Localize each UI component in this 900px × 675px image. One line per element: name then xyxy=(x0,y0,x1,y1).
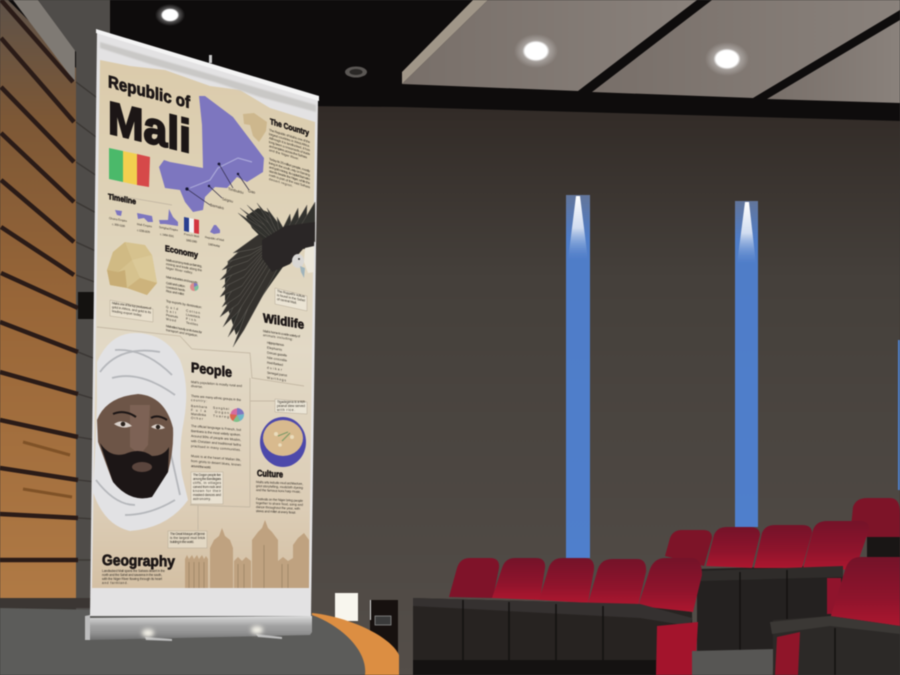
timeline labels: c. 1235-1670 xyxy=(137,228,150,234)
text: People body: Other xyxy=(191,416,204,421)
banner artwork background xyxy=(92,60,315,588)
text: Economy body: mining and trade along the xyxy=(166,262,202,272)
text: Culture body: dance throughout the year, with xyxy=(256,505,300,511)
text: People body: Bambara is the most widely spoken. xyxy=(191,429,241,437)
text: People body: Dogon xyxy=(215,410,229,415)
caption box: vulture: is found in the Sahel xyxy=(277,293,305,303)
text: Wildlife list: duiker xyxy=(267,366,283,372)
caption box: geography: building in the world. xyxy=(170,540,194,544)
caption box: people: masked dances and xyxy=(193,493,221,497)
text: People body: country: xyxy=(191,398,207,403)
Niger river xyxy=(190,158,252,188)
seats: front right row xyxy=(770,557,900,675)
text: Economy body: Niger River valley. xyxy=(166,266,193,275)
text: Economy body: Gold xyxy=(166,305,178,311)
caption box: people: among the Bandiagara xyxy=(193,477,221,481)
text: Economy body: Wood xyxy=(166,317,176,323)
heading: The Country: The Country xyxy=(270,116,309,138)
caption box: geography: The Great Mosque of Djenné xyxy=(170,532,205,536)
text: Wildlife list: Warthogs xyxy=(267,376,286,382)
text: Geography body: north and the Sahel and savanna in the south, xyxy=(102,573,162,577)
timeline map: Republic of Mali xyxy=(210,225,220,234)
timeline labels: Songhai Empire xyxy=(159,225,178,232)
text: Geography body xyxy=(102,569,165,585)
text: Geography body: Landlocked Mali spans the Sahara desert in the xyxy=(102,569,165,573)
caption box: people: carved from rock and xyxy=(193,485,221,489)
caption box: geography xyxy=(168,531,207,548)
text: Economy body: Fish xyxy=(186,317,196,322)
caption box: people: The Dogon people live xyxy=(193,473,221,477)
skyline of Djenne mosque xyxy=(185,520,309,588)
timeline labels: c. 300-1100 xyxy=(112,222,125,228)
timeline labels: 1892-1960 xyxy=(186,238,197,244)
face xyxy=(97,394,173,498)
caption box: culture: with rice. xyxy=(277,408,295,412)
text: Wildlife list: Red-flanked xyxy=(267,361,283,367)
text: Culture body: Festivals on the Niger bring people xyxy=(256,497,303,503)
text: People body: with Christian and traditional faiths xyxy=(191,439,241,447)
text: The Country body: largest countries in West Africa. xyxy=(269,132,310,148)
city labels: Ségou xyxy=(222,197,233,204)
heading: Economy: Economy xyxy=(165,243,198,260)
text: Wildlife list: Nile crocodile xyxy=(267,356,287,363)
text: Economy body: Salt xyxy=(166,309,176,315)
portrait of a Tuareg man xyxy=(93,333,188,531)
text: People body: Tuareg xyxy=(213,414,229,419)
heading: Wildlife: Wildlife xyxy=(263,311,304,332)
text: Geography body: with the Niger River flowing through its heart xyxy=(102,577,162,581)
text: Culture body: Mali's arts include mud architecture, xyxy=(256,480,303,486)
text: The Country body: and gold mining. Its capital Bamako xyxy=(269,165,310,181)
text: Wildlife list: animals including: xyxy=(263,333,293,342)
stage floor xyxy=(0,608,365,675)
text: The Country body: long been a crossroads of trade xyxy=(269,140,310,156)
Mali flag xyxy=(109,148,150,187)
text: Economy body: Gold and cotton xyxy=(166,281,185,288)
vulture upper left wing mass xyxy=(246,208,286,242)
text: Economy body: Top exports by destination: xyxy=(166,299,202,309)
auditorium wall xyxy=(300,106,900,675)
vulture upper left wing fan xyxy=(238,203,288,242)
eyebrows xyxy=(113,412,167,420)
text: Economy body: Mali's economy rests on farming, xyxy=(166,258,202,268)
map of Mali xyxy=(159,96,264,212)
title line: Mali: Mali xyxy=(108,92,191,163)
timeline labels: c. 1464-1591 xyxy=(160,232,174,238)
gold nugget xyxy=(107,242,157,295)
panel divider lines xyxy=(97,194,305,530)
text: Wildlife list: Hippopotamus xyxy=(267,341,284,347)
timeline flag: France xyxy=(184,217,199,234)
text: The Country body xyxy=(269,128,310,193)
hook on top rail xyxy=(209,55,212,63)
text: Economy body: transport and irrigation. xyxy=(166,328,198,338)
text: Economy body: Mali relies heavily on its rivers for xyxy=(166,324,203,335)
text: People body: Mandinka xyxy=(191,412,206,417)
text: Wildlife list: Dorcas gazelle xyxy=(267,351,287,358)
bowl of stew xyxy=(260,417,306,467)
banner stand base xyxy=(85,615,312,641)
turban xyxy=(93,333,188,531)
text: Wildlife list: Mali is home to a wide variety of xyxy=(263,329,300,339)
title line: Republic of: Republic of xyxy=(108,71,190,112)
vulture upper right wing fan xyxy=(283,202,315,242)
stand highlights xyxy=(142,626,263,637)
banner white sheet xyxy=(90,31,318,616)
caption box: vulture: of central Mali. xyxy=(277,297,297,305)
text: The Country body: stands beside the Niger, while the xyxy=(269,169,310,185)
seats: middle row xyxy=(665,521,869,651)
text: Culture body: stews and millet at every feast. xyxy=(256,509,296,515)
timeline labels: 1960-today xyxy=(208,242,221,248)
top rail xyxy=(96,29,319,101)
text: Culture body xyxy=(256,480,303,515)
heading: People: People xyxy=(191,359,232,380)
seats: back row xyxy=(850,498,900,557)
vulture lower wing feathers xyxy=(220,232,280,347)
caption box: vulture xyxy=(275,288,307,311)
text: Wildlife list: Elephants xyxy=(267,346,282,352)
forehead highlight and nose xyxy=(130,405,150,455)
pie chart: ethnic groups xyxy=(230,408,244,422)
text: Economy body: Textiles xyxy=(186,321,198,327)
wood panelled wall xyxy=(0,0,110,610)
text: Wildlife list: Senegal parrot xyxy=(267,371,287,378)
title xyxy=(108,71,191,163)
text: Geography body: and farmland. xyxy=(102,581,128,585)
text: The Country body: living in the south, rely on farming xyxy=(269,161,310,177)
text: People body: around the world. xyxy=(191,464,211,470)
timeline labels: Ghana Empire xyxy=(109,216,127,223)
timeline map: Ghana Empire xyxy=(115,210,122,216)
caption box: people: astronomy. xyxy=(193,497,211,501)
timeline xyxy=(109,209,224,248)
text: People body: Music is at the heart of Malian life, xyxy=(191,454,241,462)
ceiling spotlights xyxy=(155,4,749,78)
timeline map: Mali Empire xyxy=(137,213,153,222)
text: People body: Bambara xyxy=(191,404,207,409)
orange stage rim xyxy=(312,613,399,675)
vulture body xyxy=(262,222,315,272)
text: The Country body: and empires across the Sahara xyxy=(269,144,307,159)
heading: Timeline: Timeline xyxy=(108,192,136,206)
heading: Culture: Culture xyxy=(257,468,283,480)
text: Culture body: together to share food, song and xyxy=(256,501,303,507)
text: People body: Around 90% of people are Muslim, xyxy=(191,434,241,442)
text: People body: The official language is French, but xyxy=(191,424,241,432)
vulture ruff and head xyxy=(292,246,314,278)
floor light box xyxy=(335,593,358,621)
caption box: geography: is the largest mud brick xyxy=(170,536,205,540)
turban fold lines xyxy=(96,350,180,515)
caption box: gold: leading export today. xyxy=(112,309,142,317)
city markers and leader lines xyxy=(187,164,249,205)
text: People body: practised in many communities. xyxy=(191,444,241,452)
text: Economy body: Rice and millet xyxy=(166,289,184,296)
text: Economy body: Livestock herds xyxy=(166,285,185,292)
beard xyxy=(100,443,169,498)
text: People body: diverse. xyxy=(191,384,203,389)
grey wave shadow under top rail xyxy=(100,42,316,112)
text: The Country body: The Republic of Mali is one of the xyxy=(269,128,310,144)
pie chart: economy xyxy=(190,283,199,291)
heading: Geography: Geography xyxy=(102,552,176,570)
text: The Country body: Today its 20 million people, mostly xyxy=(269,157,310,173)
caption box: culture xyxy=(275,399,307,414)
timeline labels xyxy=(109,216,224,248)
text: People body: Songhai xyxy=(213,406,229,411)
text: People body xyxy=(191,380,242,472)
text: Wildlife list xyxy=(263,329,300,385)
caption box: gold: Mali is one of the top producers of xyxy=(112,301,151,310)
timeline labels: Mali Empire xyxy=(137,222,152,229)
text: Culture body: griot storytelling, mudcloth dyeing xyxy=(256,484,303,490)
city labels: Bamako xyxy=(210,203,224,210)
aisle floor xyxy=(692,649,775,675)
timeline labels: French Mali xyxy=(184,232,199,239)
black speaker box with label xyxy=(370,600,398,660)
caption box: vulture: The Ruppell's vulture xyxy=(277,289,305,299)
text: The Country body: Although it is landlocked, it has xyxy=(269,136,310,152)
text: People body: Mali's population is mostly rural and xyxy=(191,380,242,388)
caption box: people xyxy=(191,472,223,504)
eyes xyxy=(114,421,165,429)
ceiling xyxy=(0,0,900,125)
caption box: gold: gold in Africa, and gold is its xyxy=(112,305,151,315)
Africa locator map xyxy=(243,113,267,142)
vulture xyxy=(220,202,315,347)
text: Economy body: Cotton xyxy=(186,309,200,315)
text: People body: There are many ethnic groups in the xyxy=(191,394,241,402)
city labels: Timbuktu xyxy=(228,187,243,195)
text: The Country body: north is part of the vast Sahara xyxy=(269,173,310,189)
timeline labels: Republic of Mali xyxy=(205,235,224,242)
seats: front row xyxy=(413,558,702,675)
text: Economy body: Livestock xyxy=(186,313,200,319)
caption box: gold xyxy=(110,300,153,322)
blue wall light slots xyxy=(566,195,900,558)
text: The Country body: desert region. xyxy=(269,177,293,188)
roll-up banner xyxy=(90,29,319,616)
stand feet xyxy=(145,634,282,641)
caption box: culture: Tigadegena is a rich xyxy=(277,400,305,404)
vulture wing mass xyxy=(225,232,292,335)
lips xyxy=(132,462,152,472)
caption box: people: known for their xyxy=(193,489,222,493)
text: Economy body: Main industries and exports: xyxy=(166,275,198,285)
text: Culture body: and the famous kora harp music. xyxy=(256,488,301,494)
text: Economy body: Peanuts xyxy=(166,313,178,319)
text: People body: from griots to desert blues, known xyxy=(191,459,241,467)
text: Economy body xyxy=(166,258,203,339)
city labels xyxy=(210,187,255,210)
timeline map: Songhai Empire xyxy=(159,209,178,226)
text: The Country body: and the Niger River. xyxy=(269,148,299,161)
caption box: people: cliffs, in villages xyxy=(193,481,221,485)
text: People body: Fula xyxy=(191,408,206,413)
city labels: Gao xyxy=(248,189,255,195)
caption box: culture: peanut stew served xyxy=(277,404,305,408)
